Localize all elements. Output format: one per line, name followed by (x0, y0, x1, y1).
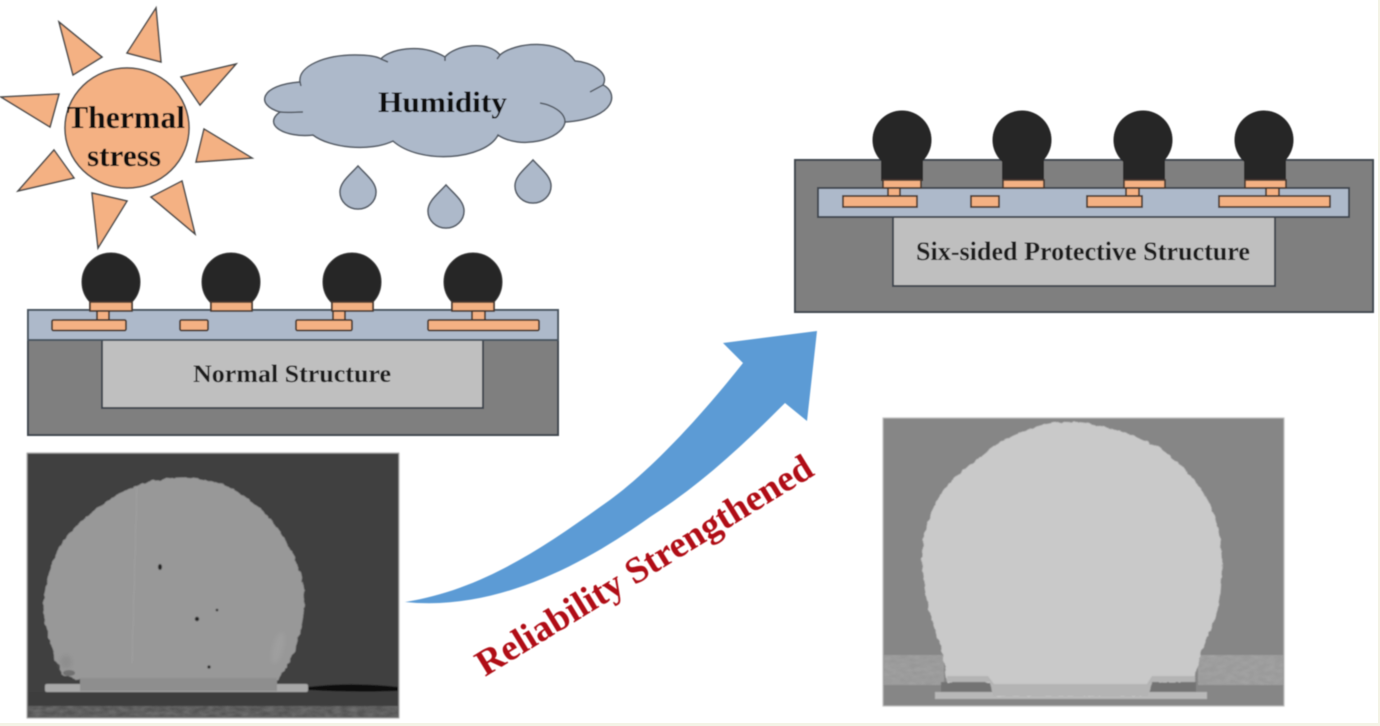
solder balls (82, 253, 502, 311)
label: humidity: Humidity (378, 86, 507, 119)
label: thermal stress (67, 99, 185, 173)
arrow: curved blue arrow (405, 331, 817, 603)
under-bump pad (45, 684, 308, 692)
textured substrate strips (884, 655, 1283, 685)
photo: six-sided structure cross-section (883, 418, 1284, 706)
icon: sun (thermal stress) (1, 8, 252, 248)
void and defects (60, 487, 398, 692)
label: thermal stress: stress (87, 138, 161, 173)
die: six-sided protective structure (893, 217, 1275, 286)
under-bump layer (947, 676, 1195, 696)
copper pads and traces (52, 302, 539, 330)
solder balls with columns (872, 110, 1294, 181)
thin pad (935, 692, 1207, 699)
panel: normal structure package (28, 253, 558, 435)
solder ball (44, 477, 304, 680)
icon: water drops (340, 160, 551, 228)
die: normal structure (102, 340, 483, 408)
icon: humidity cloud (265, 44, 612, 157)
label: thermal stress: Thermal (67, 99, 185, 135)
copper pads and traces (843, 180, 1330, 207)
die: six-sided protective structure: Six-sided Protective Structure (916, 237, 1250, 266)
textured substrate strip (28, 706, 398, 717)
label: reliability strengthened: Reliability Strengthened (468, 447, 821, 685)
solder ball (922, 422, 1222, 696)
photo: normal structure cross-section (27, 453, 399, 718)
panel: six-sided protective structure package (795, 110, 1373, 312)
die: normal structure: Normal Structure (193, 361, 391, 388)
